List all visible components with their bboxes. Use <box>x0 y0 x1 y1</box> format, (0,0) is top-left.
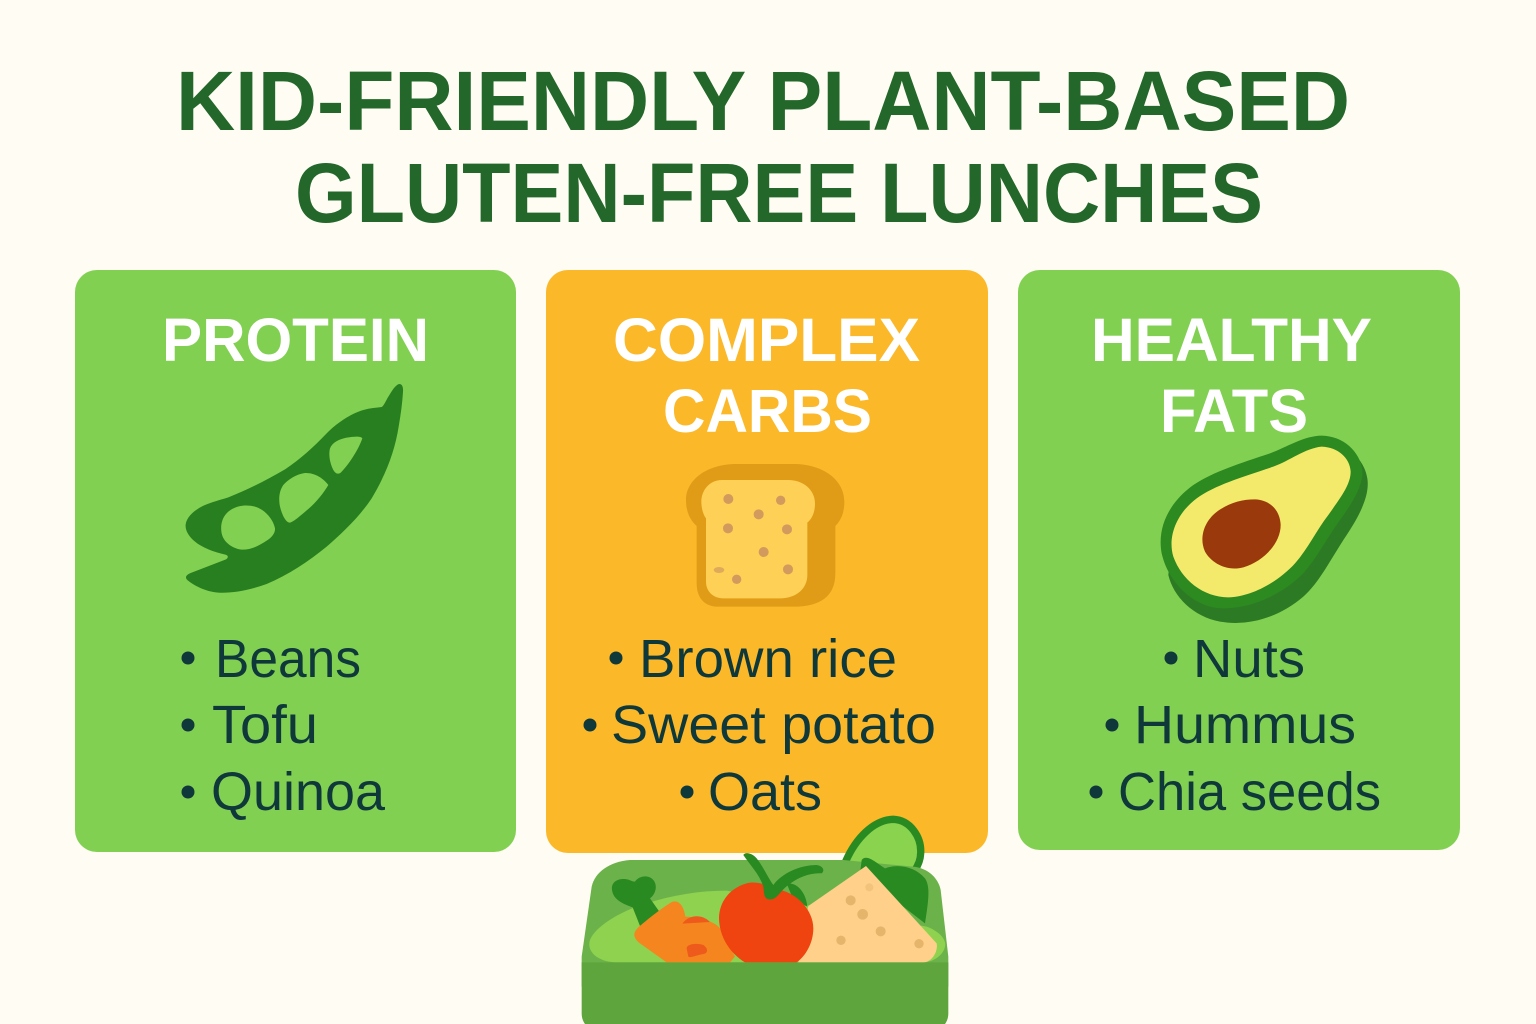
heading: complex carbs: CARBS <box>663 377 872 445</box>
heading: complex carbs <box>613 306 920 445</box>
broccoli <box>612 876 659 926</box>
leaf behind tomato <box>787 883 807 907</box>
tomato stem <box>743 853 823 899</box>
heading: complex carbs: COMPLEX <box>613 306 920 374</box>
icon: bread slice <box>686 464 844 607</box>
heading: healthy fats <box>1091 306 1372 445</box>
carrot <box>634 901 735 962</box>
heading: protein: PROTEIN <box>162 306 429 374</box>
list: protein foods: Quinoa <box>211 762 386 822</box>
icon: avocado <box>1161 436 1368 623</box>
list: carb foods <box>584 629 936 822</box>
list: carb foods: Brown rice <box>639 629 897 689</box>
list: protein foods: Tofu <box>212 695 318 755</box>
heading: healthy fats: FATS <box>1160 377 1308 445</box>
title: GLUTEN-FREE LUNCHES <box>295 146 1263 240</box>
panel: healthy fats <box>1018 270 1460 850</box>
title <box>176 54 1350 240</box>
tomato <box>719 882 813 962</box>
inner tray <box>589 891 945 962</box>
illustration: lunch box <box>582 819 948 1024</box>
sandwich greens <box>860 858 928 923</box>
title: KID-FRIENDLY PLANT-BASED <box>176 54 1350 148</box>
heading: healthy fats: HEALTHY <box>1091 306 1372 374</box>
handle <box>846 819 921 870</box>
list: fat foods <box>1090 629 1381 822</box>
panel: complex carbs <box>546 270 988 853</box>
box front <box>582 962 948 1024</box>
list: fat foods: Nuts <box>1193 629 1305 689</box>
list: carb foods: Oats <box>708 762 822 822</box>
list: protein foods: Beans <box>215 629 361 689</box>
sandwich <box>798 866 937 962</box>
list: protein foods <box>182 629 386 822</box>
list: carb foods: Sweet potato <box>611 695 936 755</box>
box back <box>582 860 948 987</box>
icon: pea pod <box>186 384 403 593</box>
list: fat foods: Chia seeds <box>1118 762 1381 822</box>
list: fat foods: Hummus <box>1134 695 1356 755</box>
panel: protein <box>75 270 516 852</box>
